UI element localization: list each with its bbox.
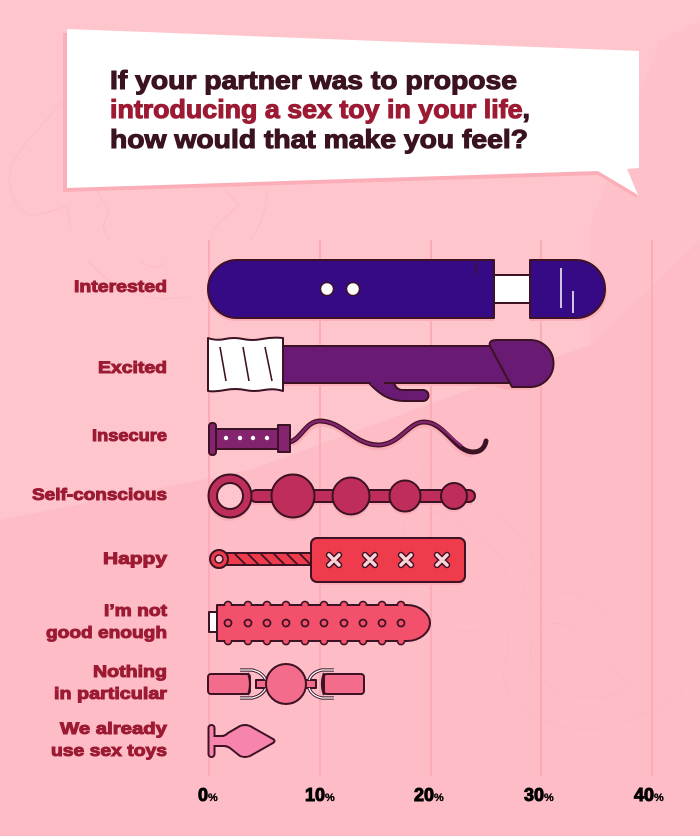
category labels: good enough xyxy=(46,623,167,642)
toy bar: Happy (paddle) xyxy=(210,538,465,585)
category labels: I’m not xyxy=(104,601,167,620)
category labels xyxy=(32,277,168,760)
title xyxy=(110,65,530,154)
toy bar: Self-conscious (anal beads) xyxy=(208,474,475,521)
x axis labels: 10% xyxy=(305,785,335,805)
category labels: Nothing xyxy=(93,662,167,681)
category labels: Self-conscious xyxy=(32,485,167,504)
toy bar: Nothing in particular (ball gag) xyxy=(208,664,364,704)
x axis labels xyxy=(198,785,664,805)
x axis labels: 0% xyxy=(198,785,218,805)
x axis labels: 40% xyxy=(634,785,664,805)
toy bar: Interested (vibrator) xyxy=(207,260,607,321)
category labels: Interested xyxy=(74,277,167,296)
category labels: We already xyxy=(60,719,168,738)
x axis labels: 20% xyxy=(414,785,444,805)
grid lines xyxy=(208,240,653,776)
toy bar: We already use sex toys (butt plug) xyxy=(208,725,274,757)
toy bar: Insecure (whip) xyxy=(209,421,486,455)
title: If your partner was to propose xyxy=(110,65,517,95)
toy bar: I'm not good enough (studded dildo) xyxy=(209,602,430,644)
category labels: Happy xyxy=(103,549,168,568)
category labels: Excited xyxy=(98,358,167,377)
category labels: Insecure xyxy=(92,426,167,445)
x axis labels: 30% xyxy=(524,785,554,805)
toy bar: Excited (rabbit vibrator) xyxy=(208,338,554,401)
speech bubble xyxy=(63,29,639,199)
title: introducing a sex toy in your life , xyxy=(110,94,530,124)
category labels: in particular xyxy=(54,684,167,703)
title: how would that make you feel? xyxy=(110,124,528,154)
category labels: use sex toys xyxy=(51,741,167,760)
